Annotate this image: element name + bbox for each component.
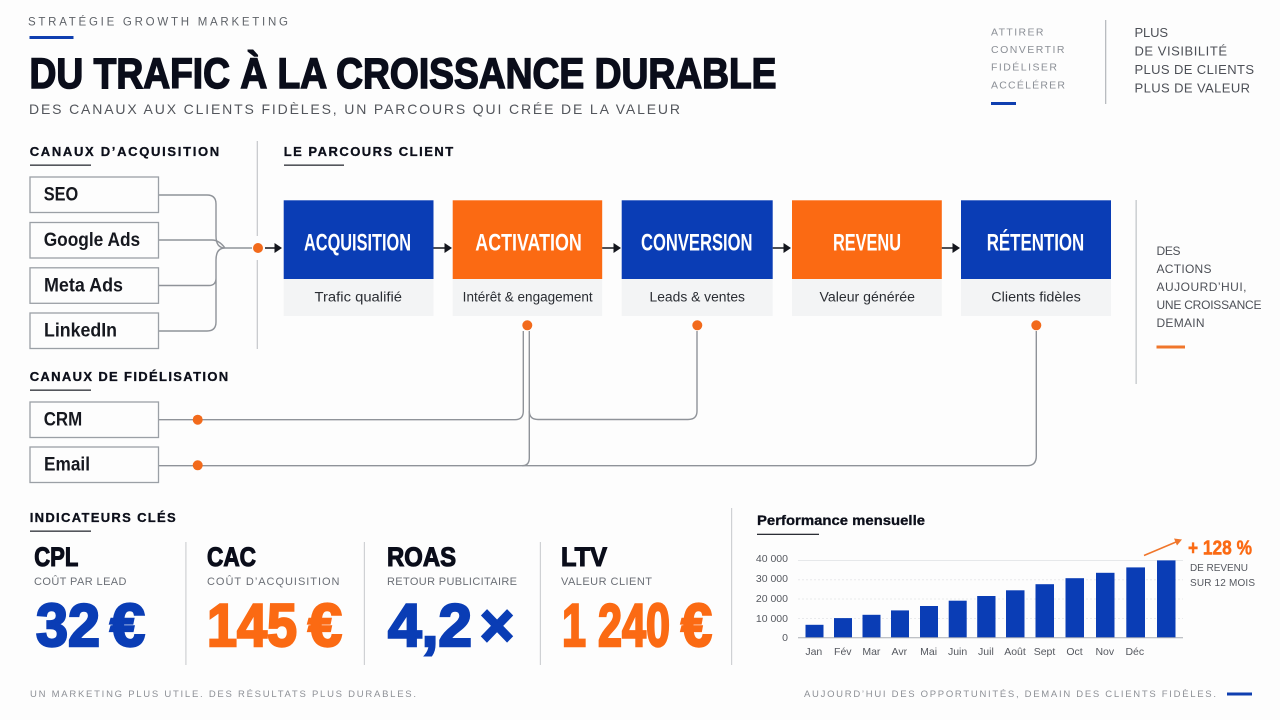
kpi: CPL: 32 xyxy=(36,592,100,659)
top right verbs: ATTIRER xyxy=(991,26,1044,38)
loyalty connectors xyxy=(158,331,1036,466)
month labels: Oct xyxy=(1066,646,1083,658)
title: DU TRAFIC À LA CROISSANCE DURABLE xyxy=(30,50,776,98)
growth callout: SUR 12 MOIS xyxy=(1190,578,1255,589)
month labels: Fév xyxy=(834,646,852,658)
month labels: Déc xyxy=(1125,646,1144,658)
top right verbs xyxy=(991,26,1065,105)
divider acquisition and journey xyxy=(256,141,258,349)
channel: LinkedIn: LinkedIn xyxy=(44,320,117,342)
kpi: ROAS: 4,2 xyxy=(388,592,472,659)
top right promises: PLUS xyxy=(1134,25,1168,40)
kpi: CAC: CAC xyxy=(207,542,256,572)
stage: conversion: Leads & ventes xyxy=(650,290,745,305)
heading: indicateurs cles: INDICATEURS CLÉS xyxy=(30,510,176,525)
right divider xyxy=(1136,200,1137,384)
top right promises: DE VISIBILITÉ xyxy=(1134,44,1227,58)
stage: acquisition: ACQUISITION xyxy=(304,230,411,256)
kpi: ROAS: ROAS xyxy=(387,542,456,572)
arrow xyxy=(434,243,452,253)
channel: CRM: CRM xyxy=(44,409,82,430)
channel: Meta Ads xyxy=(30,268,158,303)
channel: Email: Email xyxy=(44,454,90,476)
kpi: CAC: COÛT D’ACQUISITION xyxy=(207,575,340,588)
channel: Google Ads: Google Ads xyxy=(44,230,140,251)
month labels: Mar xyxy=(862,646,881,658)
stage: activation xyxy=(453,200,602,316)
side note: ACTIONS xyxy=(1156,262,1212,276)
bars xyxy=(806,560,1176,638)
acquisition connectors xyxy=(158,195,252,331)
y axis labels: 20 000 xyxy=(756,593,788,605)
chart title: Performance mensuelle xyxy=(757,512,925,528)
kpi: LTV: € xyxy=(681,592,712,659)
footer right: AUJOURD’HUI DES OPPORTUNITÉS, DEMAIN DES CLIENTS FIDÈLES. xyxy=(804,689,1216,700)
kpi: CPL: CPL xyxy=(34,542,78,572)
channel: SEO xyxy=(30,177,158,212)
kpi: LTV: LTV xyxy=(561,542,607,572)
stage: retention xyxy=(961,200,1111,316)
footer left: UN MARKETING PLUS UTILE. DES RÉSULTATS PLUS DURABLES. xyxy=(30,689,416,700)
month labels: Mai xyxy=(920,646,937,658)
subtitle: DES CANAUX AUX CLIENTS FIDÈLES, UN PARCOURS QUI CRÉE DE LA VALEUR xyxy=(29,101,680,117)
top right verbs: CONVERTIR xyxy=(991,44,1065,56)
stage: acquisition: Trafic qualifié xyxy=(314,290,402,305)
kpi: ROAS xyxy=(387,542,517,659)
arrow xyxy=(602,243,621,253)
kpi: ROAS: RETOUR PUBLICITAIRE xyxy=(387,576,517,588)
top right verbs: ACCÉLÉRER xyxy=(991,78,1065,92)
channel: LinkedIn xyxy=(30,313,158,348)
month labels xyxy=(805,646,1144,658)
month labels: Jan xyxy=(805,646,822,658)
heading: canaux de fidelisation: CANAUX DE FIDÉLISATION xyxy=(30,369,228,384)
side note: AUJOURD’HUI, xyxy=(1156,280,1246,294)
entry dot and arrow xyxy=(253,243,282,253)
stage: activation: Intérêt & engagement xyxy=(463,290,593,305)
channel: Meta Ads: Meta Ads xyxy=(44,275,123,296)
stage: activation: ACTIVATION xyxy=(475,230,582,256)
arrow xyxy=(942,243,960,253)
month labels: Sept xyxy=(1034,646,1055,658)
y axis labels xyxy=(756,553,788,644)
channel: Google Ads xyxy=(30,222,158,258)
channel: SEO: SEO xyxy=(44,185,78,206)
top right promises: PLUS DE CLIENTS xyxy=(1134,62,1254,77)
y axis labels: 10 000 xyxy=(756,613,788,625)
heading: le parcours client: LE PARCOURS CLIENT xyxy=(284,144,453,159)
loyalty channels xyxy=(30,402,158,482)
kpi: CPL: COÛT PAR LEAD xyxy=(34,575,127,588)
stage: revenu xyxy=(792,200,942,316)
growth callout: DE REVENU xyxy=(1190,563,1248,574)
kpi: ROAS: × xyxy=(480,592,514,659)
kpi: CAC: € xyxy=(308,592,342,659)
side note: DES xyxy=(1156,244,1180,258)
stage: acquisition xyxy=(284,200,434,316)
chart: performance mensuelle xyxy=(756,512,1255,658)
month labels: Juil xyxy=(978,646,994,658)
side note: DEMAIN xyxy=(1156,316,1204,330)
eyebrow: STRATÉGIE GROWTH MARKETING xyxy=(28,16,288,28)
stage: conversion: CONVERSION xyxy=(641,230,752,256)
kpi: LTV xyxy=(561,542,712,659)
month labels: Août xyxy=(1004,646,1026,658)
growth callout: + 128 % xyxy=(1188,538,1252,560)
stage: retention: Clients fidèles xyxy=(991,290,1081,305)
growth arrow xyxy=(1144,538,1182,556)
header xyxy=(28,16,776,117)
kpi: LTV: 1 240 xyxy=(562,592,670,659)
kpi: CPL: € xyxy=(110,592,145,659)
top right promises: PLUS DE VALEUR xyxy=(1134,80,1250,96)
connector dots xyxy=(193,320,1041,470)
month labels: Avr xyxy=(892,646,908,658)
kpi: LTV: VALEUR CLIENT xyxy=(561,576,652,588)
heading: canaux d'acquisition: CANAUX D’ACQUISITION xyxy=(30,144,219,159)
stage: retention: RÉTENTION xyxy=(987,228,1084,256)
month labels: Juin xyxy=(948,646,967,658)
side note: UNE CROISSANCE xyxy=(1156,298,1262,312)
stage: revenu: Valeur générée xyxy=(820,290,915,305)
arrow xyxy=(773,243,791,253)
kpi: CPL xyxy=(34,542,145,659)
kpi: CAC xyxy=(207,542,342,659)
top right verbs: FIDÉLISER xyxy=(991,60,1057,74)
stage: conversion xyxy=(622,200,773,316)
stage: revenu: REVENU xyxy=(833,230,901,256)
kpi: CAC: 145 xyxy=(207,592,297,659)
growth callout xyxy=(1188,538,1255,589)
top right promises xyxy=(1134,25,1254,96)
acquisition channels xyxy=(30,177,158,348)
y axis labels: 40 000 xyxy=(756,553,788,565)
month labels: Nov xyxy=(1095,646,1115,658)
y axis labels: 30 000 xyxy=(756,573,788,585)
side note xyxy=(1156,244,1262,348)
y axis labels: 0 xyxy=(782,632,788,644)
